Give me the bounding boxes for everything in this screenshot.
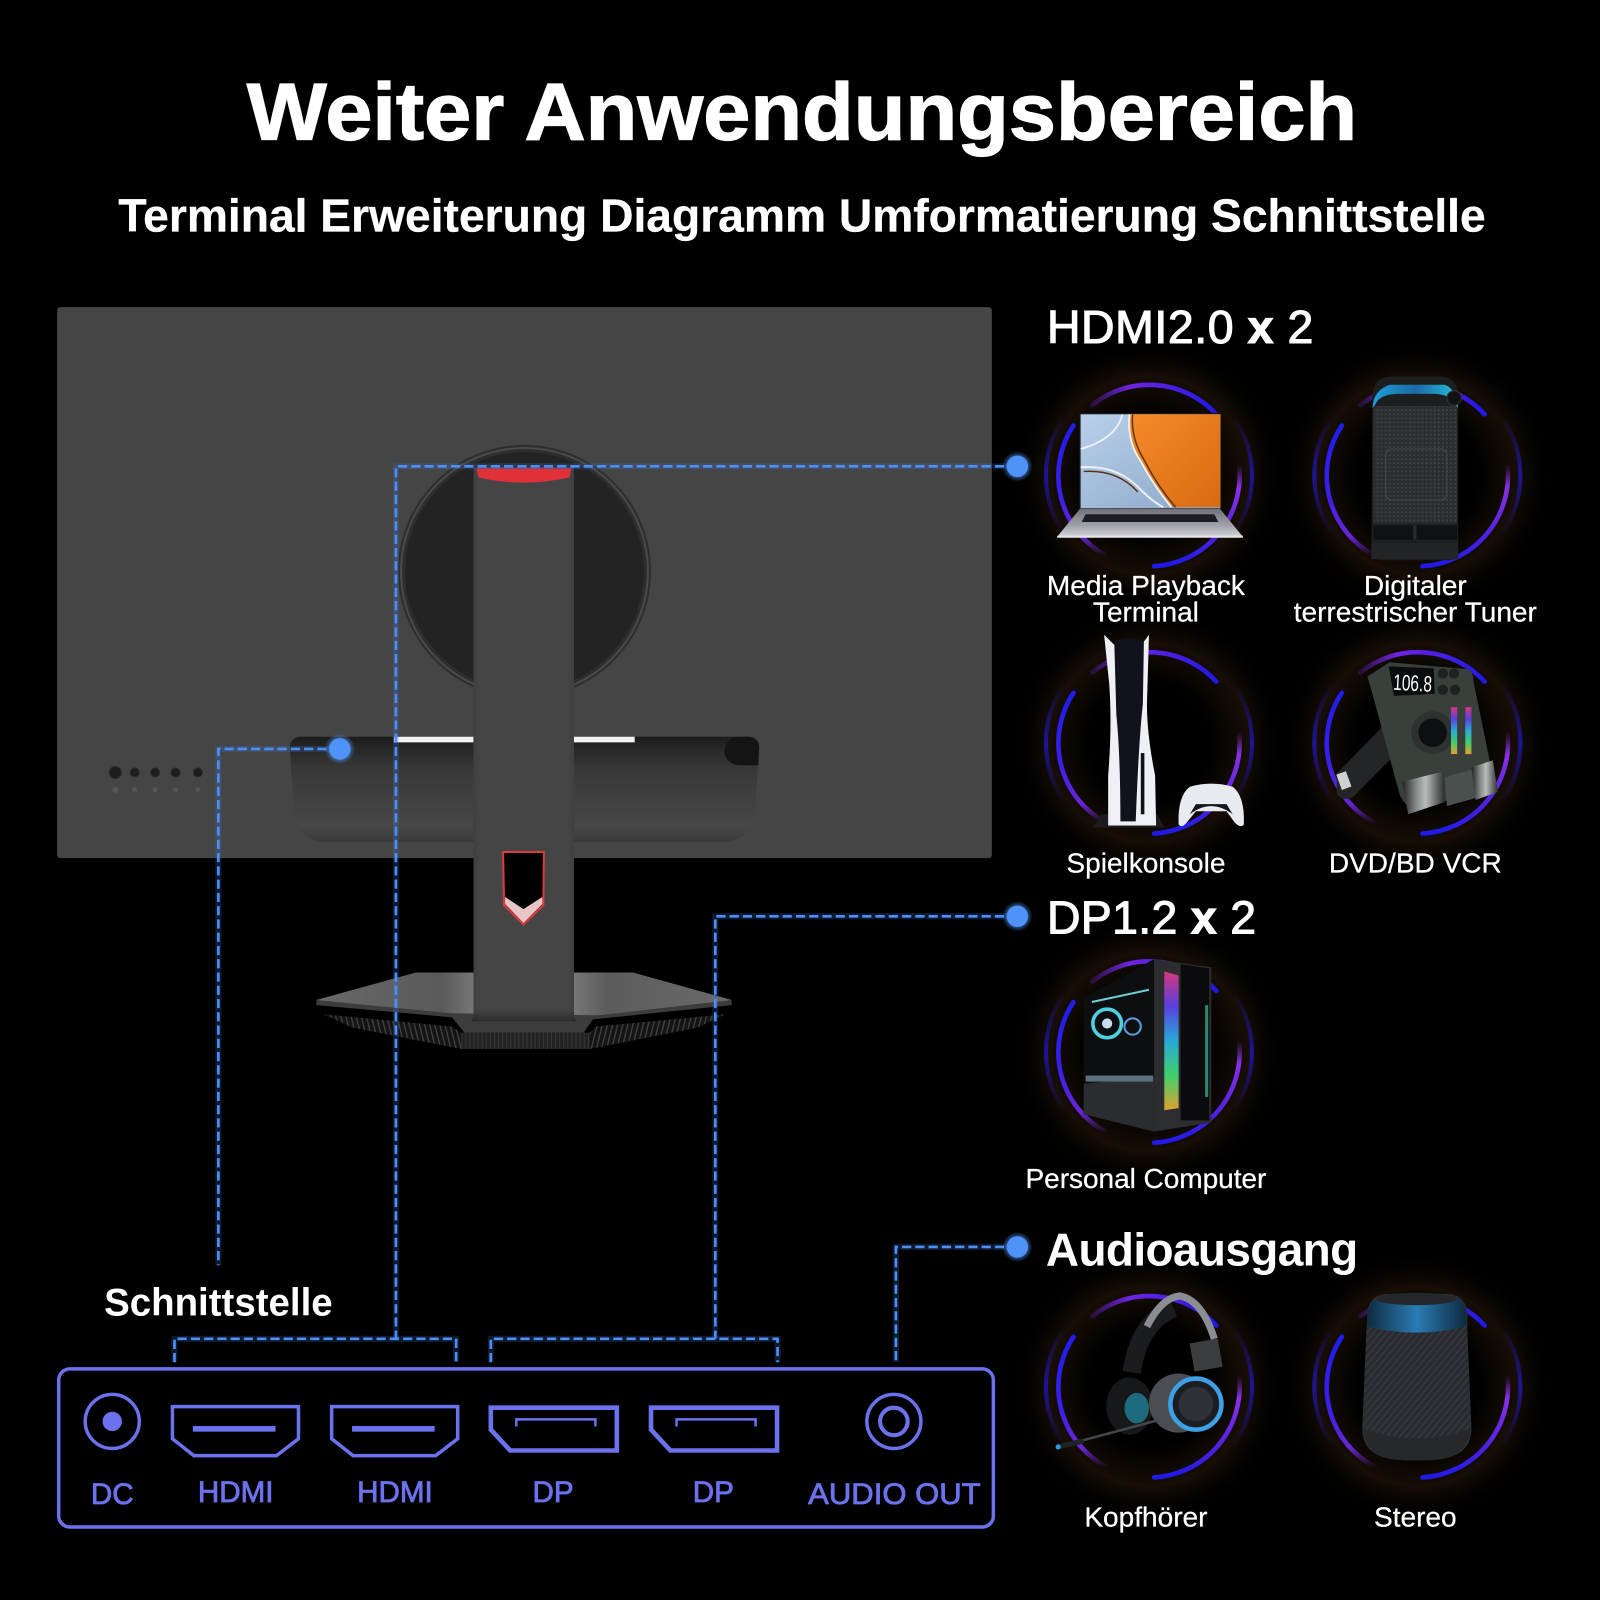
label: HDMI 2: HDMI [357,1476,433,1509]
label: Kopfhörer: Kopfhörer [1084,1502,1208,1533]
icon: HDMI port 2 [332,1407,458,1456]
cable handle opening [503,852,544,924]
connector: DP [491,901,1033,1362]
label: Media Playback Terminal: Terminal [1093,596,1199,627]
control buttons [109,766,203,793]
red neck cap [477,468,571,483]
device: smart speaker [1314,1293,1520,1477]
connector: interface [218,734,355,1265]
icon: smart speaker [1362,1293,1471,1460]
VESA mount disc [398,445,651,698]
icon: game console [1093,635,1244,828]
icon: desktop PC [1084,959,1211,1132]
label: Digitaler terrestrischer Tuner: terrestrischer Tuner [1294,596,1537,627]
label: Spielkonsole: Spielkonsole [1066,847,1225,878]
monitor back panel [57,307,992,858]
ring: smart speaker [1314,1296,1520,1477]
label: Digitaler terrestrischer Tuner: Digitaler [1364,570,1467,601]
icon: headset [1056,1296,1223,1449]
heading: HDMI2.0 x 2: HDMI2.0 x 2 [1047,301,1313,353]
heading: Audioausgang: Audioausgang [1046,1223,1358,1275]
device: game console [1046,635,1252,834]
ring: laptop [1046,385,1252,566]
monitor rear view [57,307,992,1049]
icon: DisplayPort 1 [491,1408,617,1451]
device: party speaker [1314,377,1520,566]
ring: FM transmitter [1314,652,1520,834]
label: AUDIO OUT: AUDIO OUT [808,1478,981,1511]
device: FM transmitter [1314,652,1520,834]
label: HDMI 1: HDMI [198,1476,274,1509]
icon: FM transmitter [1336,662,1498,814]
icon: party speaker [1371,377,1461,560]
port recess [290,737,759,842]
icon: FM transmitter: 106.8 [1393,670,1433,697]
title: Weiter Anwendungsbereich [247,67,1357,157]
panel frame [59,1369,993,1527]
icon: DisplayPort 2 [651,1408,777,1451]
ring: headset [1046,1296,1252,1477]
device: laptop [1046,385,1252,566]
subtitle: Terminal Erweiterung Diagramm Umformatierung Schnittstelle [118,190,1486,242]
panel: port diagram [59,1369,993,1527]
label: DP 2: DP [693,1476,734,1509]
label: Personal Computer: Personal Computer [1026,1163,1266,1194]
ring: party speaker [1314,385,1520,566]
white port strips [394,737,635,742]
label: DP 1: DP [533,1476,574,1509]
heading: Schnittstelle: Schnittstelle [104,1280,333,1324]
label: DC: DC [91,1478,134,1511]
heading: DP1.2 x 2: DP1.2 x 2 [1047,892,1256,944]
icon: audio out port [867,1394,921,1448]
ambient glow behind devices [1014,341,1552,1521]
icon: laptop [1057,413,1243,538]
device: desktop PC [1046,959,1252,1143]
label: Media Playback Terminal: Media Playback [1047,570,1246,601]
label: DVD/BD VCR: DVD/BD VCR [1329,847,1502,878]
connector: audio [896,1232,1033,1362]
ring: game console [1046,652,1252,834]
stand base [316,972,732,1049]
icon: DC port [85,1394,139,1448]
connector: HDMI [174,451,1033,1362]
cable clip [724,737,759,765]
label: Stereo: Stereo [1374,1502,1457,1533]
stand neck [471,467,577,1021]
icon: HDMI port 1 [172,1407,298,1456]
device: headset [1046,1296,1252,1477]
ring: desktop PC [1046,961,1252,1143]
